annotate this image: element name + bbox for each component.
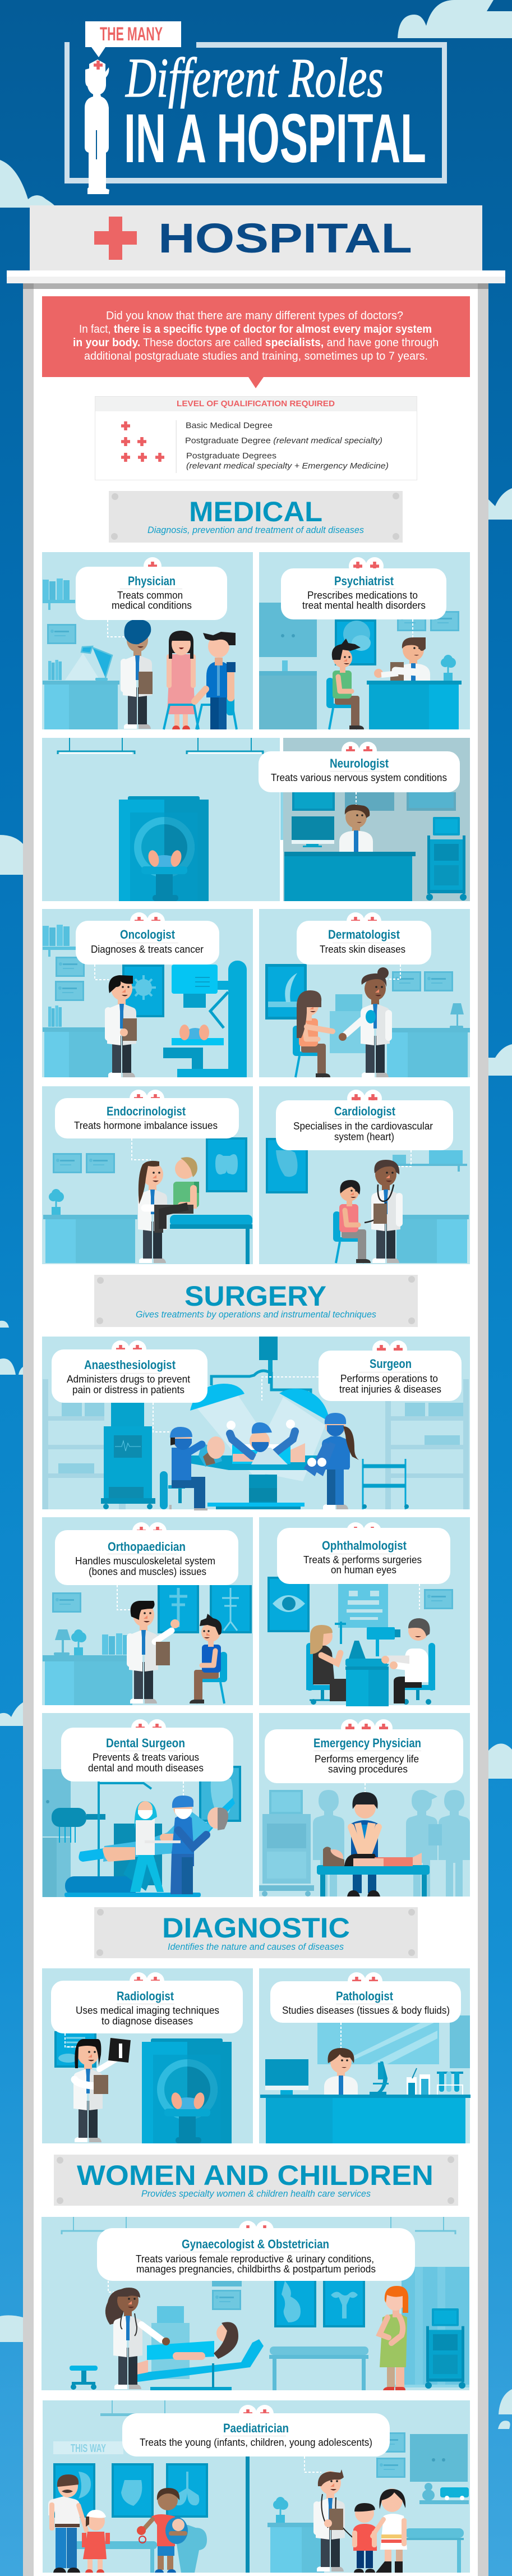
bubble: Pathologist — [270, 1972, 461, 2023]
cardiologist with stethoscope — [365, 1160, 403, 1263]
cabinet — [43, 1769, 71, 1897]
panel: Psychiatrist — [259, 552, 470, 729]
patient — [103, 1807, 228, 1862]
neurologist — [339, 805, 373, 856]
wall items — [52, 1585, 252, 1633]
bubble: Ophthalmologist: Ophthalmologist — [322, 1539, 407, 1553]
endocrinologist — [138, 1161, 173, 1263]
panel: Gynaecologist & Obstetrician — [41, 2217, 469, 2390]
bubble: Psychiatrist: Psychiatrist — [334, 574, 394, 588]
psychiatrist at desk — [374, 637, 430, 689]
thyroid poster — [206, 1137, 247, 1192]
bubble: Anaesthesiologist: pain or distress in patients — [72, 1384, 184, 1395]
wall shelves — [43, 1379, 469, 1509]
bubble: Paediatrician: Treats the young (infants, children, young adolescents) — [140, 2436, 372, 2448]
paediatrician — [313, 2469, 372, 2572]
bubble: Gynaecologist & Obstetrician: Treats various female reproductive & urinary conditions, — [136, 2253, 374, 2265]
bubble: Emergency Physician: Emergency Physician — [313, 1736, 421, 1750]
bubble: Ophthalmologist: on human eyes — [331, 1564, 396, 1576]
bubble: Psychiatrist — [281, 557, 446, 619]
furniture — [43, 1153, 137, 1263]
icon: red cross — [94, 217, 137, 260]
legend: level of qualification — [95, 396, 417, 480]
bubble: Surgeon: Performs operations to — [340, 1372, 438, 1384]
dermatologist — [339, 967, 392, 1077]
medical trolley — [426, 817, 467, 901]
sign text: HOSPITAL — [158, 215, 412, 261]
shelf and desk — [389, 1150, 469, 1263]
banner: Diagnostic: Identifies the nature and causes of diseases — [168, 1941, 344, 1952]
bubble: Endocrinologist: Treats hormone imbalance issues — [74, 1119, 218, 1131]
bubble: Oncologist: Oncologist — [120, 927, 176, 942]
heading: Different Roles: Different Roles — [124, 47, 384, 109]
bubble: Surgeon: Surgeon — [370, 1357, 412, 1371]
bubble: Cardiologist: Specialises in the cardiovascular — [293, 1120, 433, 1132]
hospital sign — [30, 205, 482, 270]
man patient with chairs — [164, 632, 237, 729]
banner: Women and Children: WOMEN AND CHILDREN — [77, 2160, 433, 2191]
bubble: Pathologist: Pathologist — [336, 1989, 394, 2003]
dental chair — [64, 1798, 235, 1897]
examination bed — [269, 2347, 368, 2390]
mother in white — [372, 2488, 407, 2573]
patient in green — [326, 639, 364, 729]
bubble: Physician: medical conditions — [112, 599, 192, 611]
bubble: Psychiatrist: Prescribes medications to — [307, 589, 418, 601]
x-ray poster — [54, 2031, 96, 2068]
panel: Cardiologist — [259, 1086, 470, 1264]
ceiling lights — [62, 2217, 455, 2234]
panel: Endocrinologist — [42, 1086, 253, 1264]
woman patient — [293, 990, 333, 1077]
intro callout: in your body. These doctors are called specialists, and have gone through — [73, 336, 439, 349]
patient in pink — [333, 1180, 371, 1263]
bubble: Radiologist — [51, 1972, 243, 2033]
orthopaedician — [127, 1601, 179, 1703]
MRI scanner — [142, 2038, 232, 2143]
microscope and test tubes — [370, 2061, 463, 2095]
legend labels: Basic Medical Degree — [186, 421, 273, 430]
ultrasound and reclining patient — [135, 2306, 264, 2390]
legend labels: Postgraduate Degree (relevant medical specialty) — [185, 436, 382, 446]
intro callout: In fact, there is a specific type of doctor for almost every major system — [79, 323, 432, 336]
panel: Ophthalmologist — [259, 1517, 470, 1706]
gynaecologist — [105, 2288, 170, 2389]
lamp, plant, books and desk — [43, 1629, 132, 1705]
monitor — [292, 816, 334, 847]
ceiling light and divider — [100, 2400, 250, 2573]
speech bubble: The Many: THE MANY — [100, 24, 163, 45]
wall posters — [212, 2281, 365, 2327]
ghost trolley — [259, 1790, 314, 1897]
bubble: Dermatologist: Treats skin diseases — [320, 943, 405, 955]
ophthalmologist — [381, 1618, 435, 1705]
bubble: Dental Surgeon: dental and mouth diseases — [88, 1762, 204, 1774]
panel: Physician — [42, 552, 253, 729]
girl with bandage — [82, 2510, 110, 2573]
bubble: Neurologist — [259, 742, 460, 792]
panel: Emergency Physician — [259, 1713, 470, 1897]
bubble: Surgeon — [319, 1340, 462, 1401]
bubble: Orthopaedician: (bones and muscles) issues — [89, 1565, 206, 1577]
anaesthesiologist — [160, 1427, 207, 1509]
father — [48, 2474, 86, 2573]
toy shelf — [419, 2483, 469, 2504]
bubble: Ophthalmologist: Treats & performs surgeries — [303, 1554, 422, 1565]
emergency physician — [347, 1792, 380, 1897]
bubble: Oncologist — [76, 912, 219, 965]
heart poster — [266, 1138, 308, 1193]
bubble: Physician — [76, 557, 227, 620]
bubble: Dermatologist — [297, 912, 431, 965]
operating table and patient — [190, 1436, 328, 1509]
office furniture — [43, 925, 114, 1077]
brain poster — [335, 619, 376, 665]
banner: Medical: Diagnosis, prevention and treatment of adult diseases — [147, 525, 364, 535]
bubble: Dental Surgeon: Dental Surgeon — [106, 1736, 185, 1750]
wall posters — [53, 2463, 208, 2518]
panel: Dermatologist — [259, 909, 470, 1077]
lamp and desk — [387, 1003, 470, 1077]
lab window — [317, 2015, 470, 2068]
stool — [70, 2366, 98, 2390]
bed and patient — [317, 1847, 430, 1897]
panel: Radiologist — [42, 1968, 253, 2143]
banner: Medical: MEDICAL — [189, 496, 322, 527]
anaesthesia machine — [101, 1403, 155, 1509]
banner: Surgery: Gives treatments by operations and instrumental techniques — [136, 1309, 376, 1320]
tooth poster — [199, 1766, 241, 1822]
banner: Medical — [109, 491, 403, 543]
bubble: Surgeon: treat injuries & diseases — [339, 1383, 441, 1395]
legend crosses — [121, 421, 164, 462]
patient woman — [306, 1625, 347, 1705]
female dental surgeon with hijab — [130, 1801, 181, 1892]
bubble: Dermatologist: Dermatologist — [328, 927, 400, 942]
legend heading: LEVEL OF QUALIFICATION REQUIRED — [177, 399, 335, 408]
woman patient — [167, 631, 196, 729]
intro callout — [42, 296, 470, 388]
radiotherapy machine — [163, 961, 247, 1077]
office furniture — [43, 578, 119, 729]
bubble: Oncologist: Diagnoses & treats cancer — [91, 943, 204, 955]
legend labels — [185, 421, 389, 471]
benches — [73, 2525, 464, 2573]
bubble: Paediatrician: Paediatrician — [223, 2421, 289, 2435]
radiologist holding x-ray — [73, 2038, 131, 2142]
title block — [64, 21, 447, 194]
nurse in scrubs — [306, 1413, 359, 1509]
drill tray — [52, 1781, 162, 1885]
bubble: Anaesthesiologist: Administers drugs to prevent — [67, 1373, 190, 1385]
bubble: Orthopaedician: Orthopaedician — [108, 1540, 186, 1554]
bubble: Anaesthesiologist — [52, 1340, 207, 1403]
desk — [267, 2497, 324, 2573]
examination bed — [170, 1215, 252, 1264]
ghost staff — [313, 1790, 470, 1897]
banner: Diagnostic — [94, 1907, 418, 1958]
bubble: Emergency Physician: Performs emergency life — [315, 1753, 419, 1765]
wall frames — [292, 792, 456, 811]
eye examination instrument — [335, 1622, 400, 1706]
banner: Women and Children — [54, 2155, 458, 2206]
legend labels: (relevant medical specialty + Emergency Medicine) — [186, 461, 389, 471]
bubble: Anaesthesiologist: Anaesthesiologist — [84, 1358, 176, 1372]
legend labels: Postgraduate Degrees — [186, 451, 276, 461]
bubble: Psychiatrist: treat mental health disorders — [302, 599, 426, 611]
bubble: Cardiologist: Cardiologist — [334, 1104, 396, 1118]
eye chart — [338, 1584, 388, 1628]
desk — [284, 852, 416, 901]
pathologist — [324, 2048, 358, 2101]
bubble: Paediatrician — [122, 2405, 390, 2456]
surgical lights — [190, 1337, 330, 1481]
bubble: Emergency Physician: saving procedures — [328, 1763, 408, 1775]
boy — [352, 2503, 377, 2573]
ceiling lights — [58, 738, 263, 754]
bubble: Orthopaedician: Handles musculoskeletal system — [75, 1555, 215, 1567]
machine — [330, 994, 366, 1053]
desk — [260, 2095, 471, 2143]
cabinets — [259, 603, 317, 729]
oncologist — [105, 975, 137, 1077]
bubble: Radiologist: Radiologist — [117, 1989, 174, 2003]
right side wall furniture — [376, 2432, 468, 2482]
panel: Orthopaedician — [42, 1517, 253, 1705]
panel: Dental Surgeon — [42, 1713, 253, 1897]
sign: this way: THIS WAY — [71, 2442, 106, 2455]
desk and plant — [367, 655, 462, 729]
bubble: Physician: Physician — [128, 574, 176, 588]
panel: Neurologist — [42, 738, 470, 901]
title frame — [64, 42, 447, 183]
bubble: Gynaecologist & Obstetrician: manages pregnancies, childbirths & postpartum periods — [136, 2263, 376, 2275]
surgeon — [227, 1420, 295, 1464]
panel: Pathologist — [259, 1968, 471, 2143]
instrument stand — [362, 1459, 409, 1509]
banner: Surgery — [94, 1275, 418, 1327]
bubble: Emergency Physician — [265, 1719, 463, 1783]
doctor with turban — [121, 619, 153, 729]
bubble: Neurologist: Treats various nervous system conditions — [271, 772, 447, 783]
bubble: Cardiologist: system (heart) — [334, 1131, 394, 1142]
bubble: Radiologist: to diagnose diseases — [102, 2015, 193, 2027]
panel: Operating theatre — [42, 1337, 470, 1509]
curtain and trolley — [393, 2267, 469, 2389]
banner: Diagnostic: DIAGNOSTIC — [162, 1912, 350, 1944]
icon: nurse silhouette — [85, 59, 109, 194]
bubble: Cardiologist — [276, 1090, 453, 1150]
sign: this way — [53, 2441, 123, 2455]
bubble: Ophthalmologist — [277, 1522, 450, 1584]
patient in green — [159, 1157, 199, 1233]
speech bubble: The Many — [85, 21, 181, 57]
banner: Surgery: SURGERY — [184, 1280, 326, 1312]
patient in blue — [190, 1614, 227, 1703]
eye poster — [267, 1577, 310, 1632]
bubble: Dental Surgeon — [61, 1719, 233, 1781]
bubble: Gynaecologist & Obstetrician — [97, 2221, 415, 2281]
banner: Women and Children: Provides specialty women & children health care services — [141, 2188, 371, 2199]
bubble: Pathologist: Studies diseases (tissues & body fluids) — [282, 2004, 450, 2016]
intro callout: Did you know that there are many different types of doctors? — [106, 309, 403, 322]
bubble: Radiologist: Uses medical imaging techniques — [76, 2004, 219, 2016]
bubble: Endocrinologist — [55, 1090, 239, 1138]
panel: Oncologist — [42, 909, 253, 1077]
male dental surgeon — [170, 1796, 206, 1894]
bubble: Dental Surgeon: Prevents & treats various — [93, 1751, 199, 1763]
bubble: Endocrinologist: Endocrinologist — [107, 1104, 186, 1118]
MRI scanner — [119, 796, 209, 901]
panel: Paediatrician — [43, 2400, 470, 2573]
skin poster — [265, 964, 307, 1020]
mother with baby — [137, 2488, 188, 2573]
bubble: Neurologist: Neurologist — [330, 756, 389, 770]
pregnant woman — [380, 2286, 408, 2390]
intro callout: additional postgraduate studies and training, sometimes up to 7 years. — [84, 350, 428, 362]
virus poster — [122, 965, 164, 1017]
bubble: Orthopaedician — [55, 1522, 238, 1585]
monitor — [265, 2059, 308, 2095]
bubble: Physician: Treats common — [117, 589, 183, 601]
bubble: Gynaecologist & Obstetrician: Gynaecologist & Obstetrician — [182, 2237, 329, 2251]
